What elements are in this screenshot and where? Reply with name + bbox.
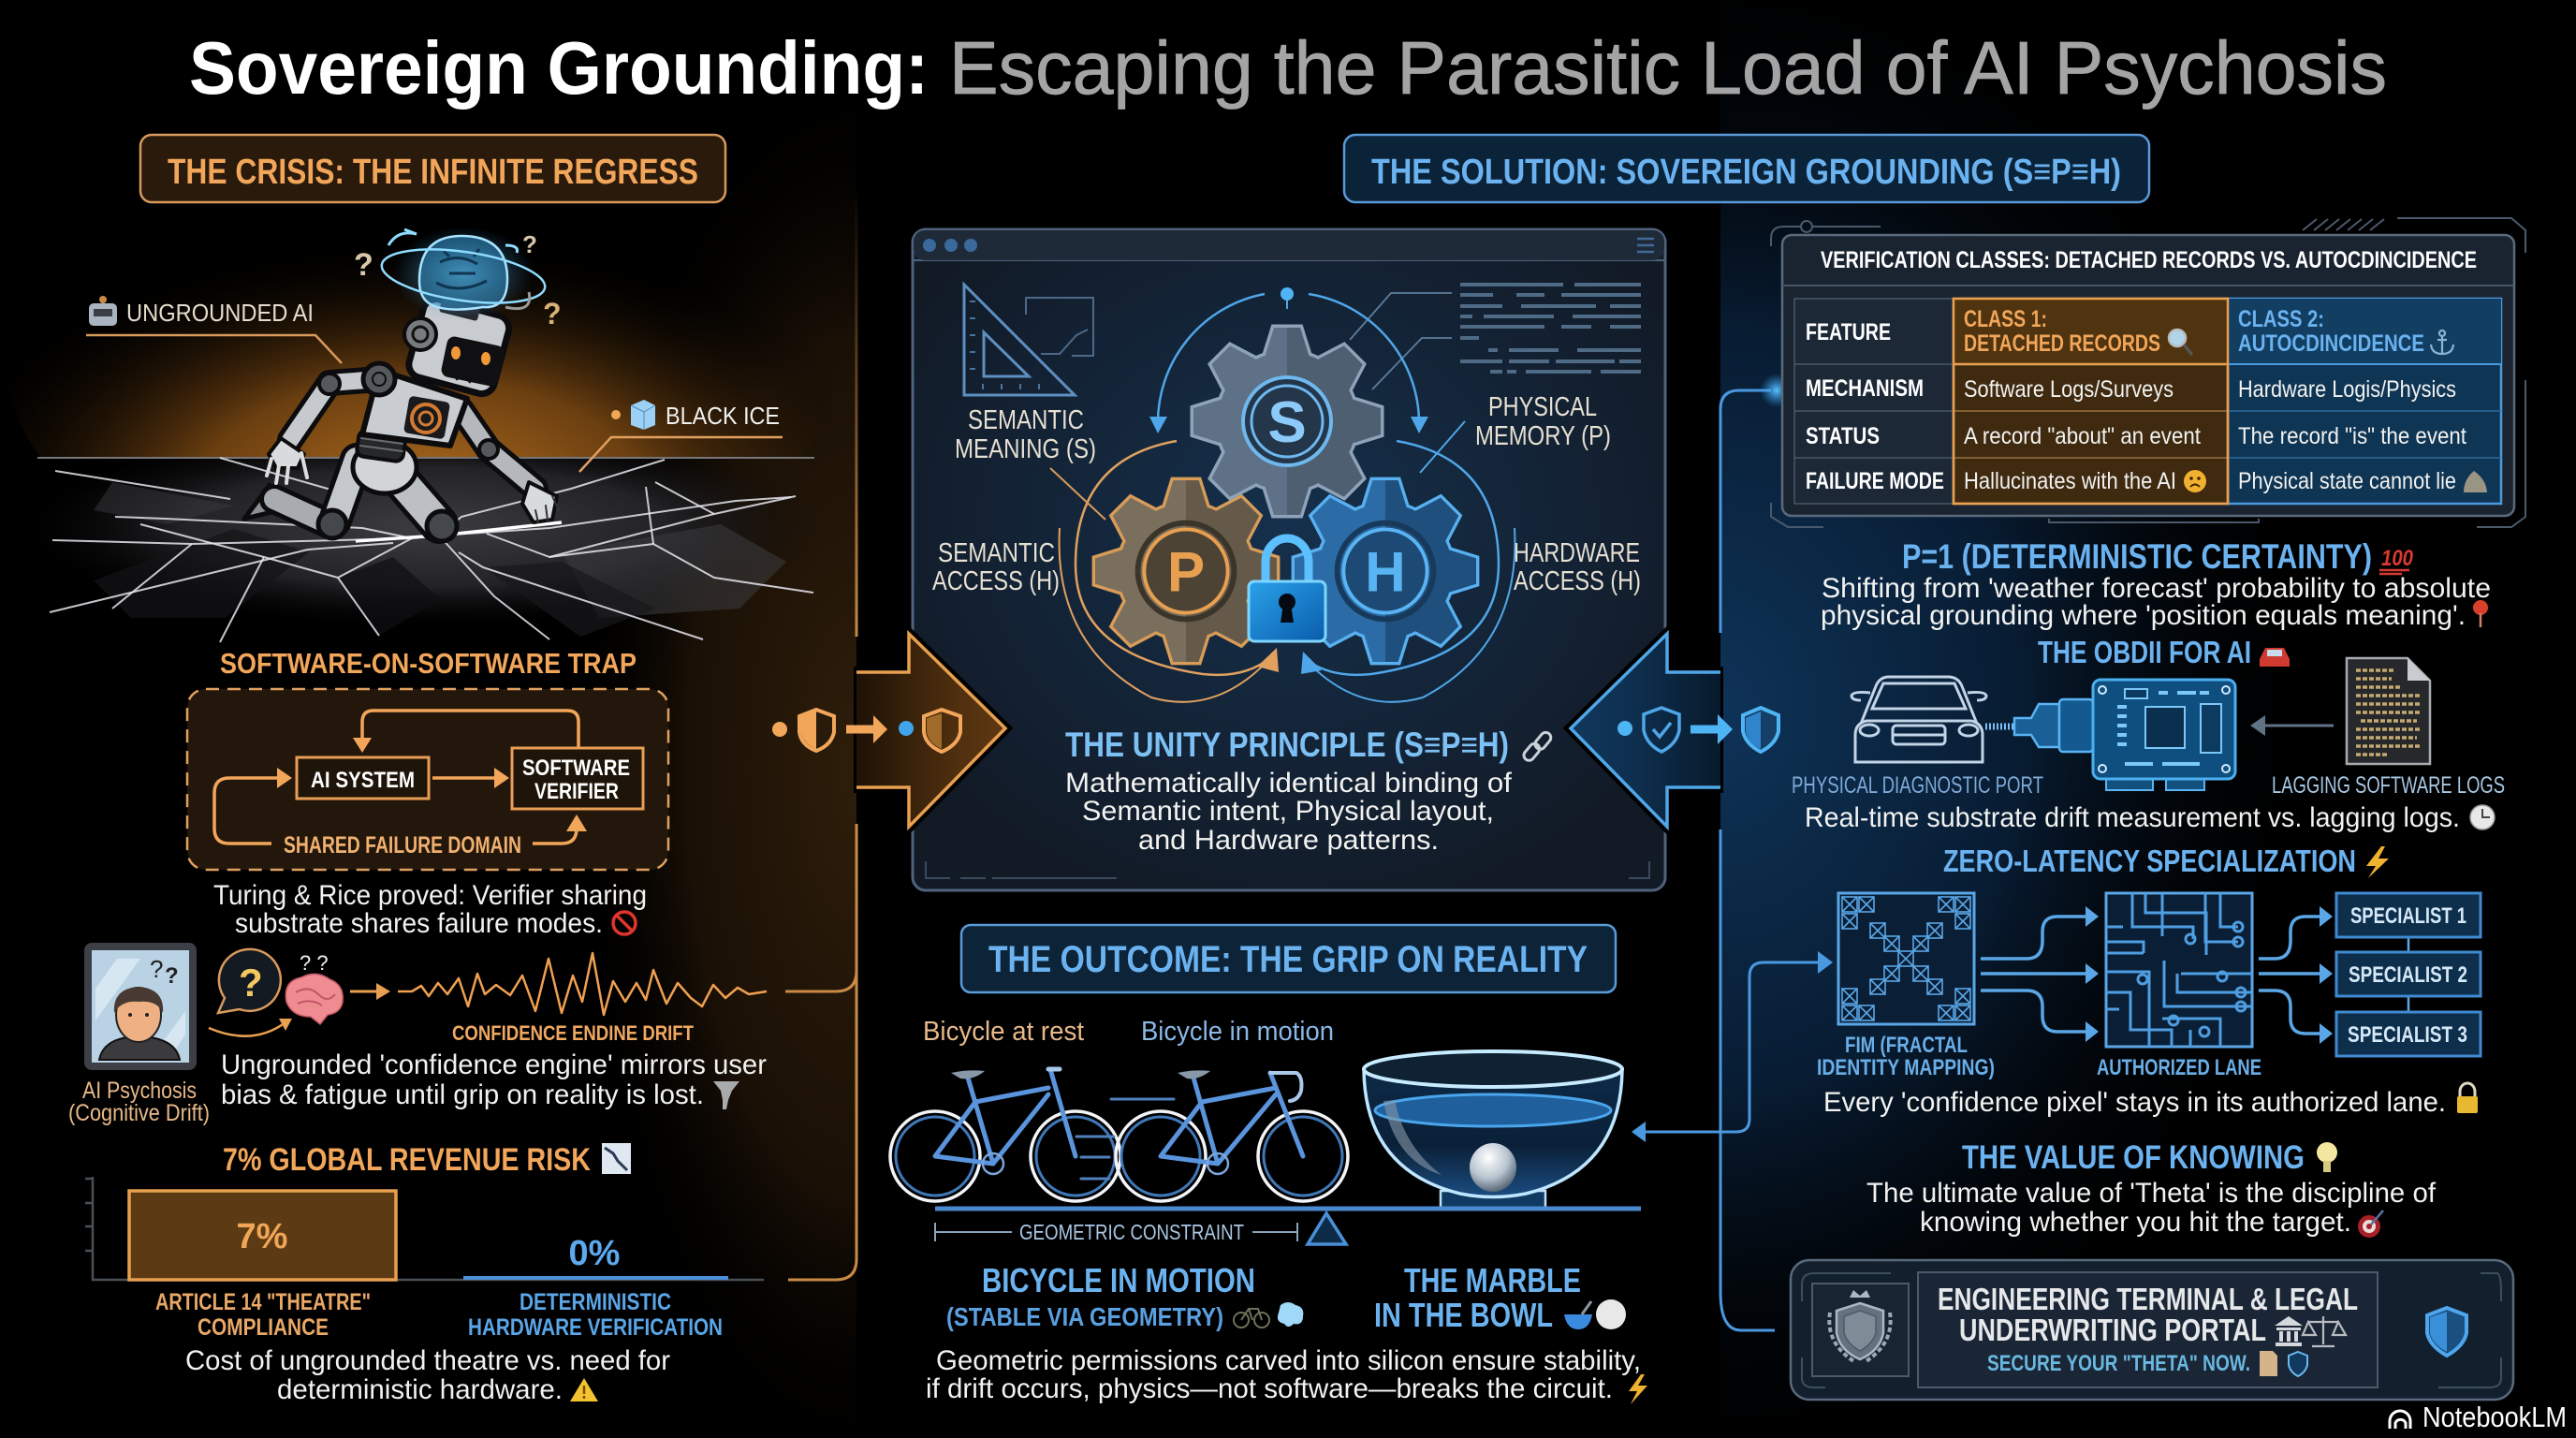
icon: small shield — [2289, 1352, 2307, 1376]
icon: speech bubble and brain: ? — [239, 961, 263, 1005]
robot — [244, 296, 559, 541]
text box: SECURE YOUR "THETA" NOW. — [1987, 1351, 2250, 1376]
outcome heading: THE OUTCOME: THE GRIP ON REALITY — [988, 939, 1588, 980]
heading: unity principle: THE UNITY PRINCIPLE (S≡P≡H) — [1065, 726, 1509, 764]
row: mechanism: Hardware Logis/Physics — [2238, 376, 2456, 403]
illustration: AI psychosis mirror: ? — [165, 963, 179, 989]
text box: UNDERWRITING PORTAL — [1959, 1313, 2266, 1347]
section: value of knowing: THE VALUE OF KNOWING — [1962, 1139, 2305, 1176]
text: confidence pixel: Every 'confidence pixel' stays in its authorized lane. — [1823, 1087, 2446, 1118]
node: software verifier — [512, 748, 643, 809]
icon: hundred: 100 — [2381, 546, 2414, 571]
text: real-time substrate: Real-time substrate drift measurement vs. lagging logs. — [1805, 802, 2460, 833]
node: software verifier: SOFTWARE — [522, 756, 630, 781]
icon: padlock — [1249, 538, 1325, 641]
chart: confidence engine drift waveform: CONFIDENCE ENDINE DRIFT — [452, 1021, 694, 1045]
bar: 0 percent: 0% — [569, 1234, 620, 1273]
label: physical memory — [1420, 392, 1611, 473]
label: Black Ice — [579, 400, 783, 472]
axis label: deterministic: HARDWARE VERIFICATION — [468, 1314, 723, 1341]
outcome heading — [961, 925, 1616, 992]
panel: engineering terminal portal — [1791, 1260, 2513, 1400]
caption: bicycle in motion: Bicycle in motion — [1141, 1017, 1334, 1047]
row: failure mode: Physical state cannot lie — [2238, 468, 2456, 494]
icon: OBD connector — [1985, 699, 2093, 752]
section: value of knowing: The ultimate value of 'Theta' is the discipline of — [1866, 1178, 2437, 1209]
labels: diagnostic port and logs: PHYSICAL DIAGNOSTIC PORT — [1792, 772, 2043, 799]
connector: crisis panel orange rail — [785, 187, 857, 1280]
illustration: marble in bowl — [1364, 1051, 1622, 1209]
icon: prohibited — [613, 912, 636, 934]
box: specialist 1 — [2336, 893, 2481, 937]
row: mechanism — [1806, 375, 2456, 403]
decorative data lines — [1350, 285, 1641, 389]
icon: warning — [570, 1378, 598, 1401]
label: physical memory: PHYSICAL — [1488, 392, 1597, 422]
text box — [1918, 1272, 2378, 1387]
text: confidence engine — [221, 1049, 767, 1110]
label: Ungrounded AI — [86, 296, 342, 363]
row: mechanism: Software Logs/Surveys — [1964, 376, 2174, 403]
text: unity description: Semantic intent, Physical layout, — [1082, 796, 1494, 827]
icon: half shield gold — [924, 710, 960, 752]
illustration: robot on cracked black ice — [22, 228, 814, 642]
text box: ENGINEERING TERMINAL & LEGAL — [1938, 1282, 2358, 1316]
row: failure mode — [1806, 468, 2487, 494]
label: semantic access: ACCESS (H) — [932, 566, 1060, 596]
caption: marble in bowl: IN THE BOWL — [1374, 1296, 1553, 1334]
box: specialist 2 — [2336, 952, 2481, 996]
node: AI system — [297, 757, 429, 799]
axis label: article 14 — [155, 1289, 371, 1341]
text: unity description: and Hardware patterns. — [1138, 825, 1439, 856]
label: hardware access — [1514, 538, 1641, 596]
caption: bicycle in motion stable — [946, 1261, 1303, 1331]
table column fills — [1794, 299, 2501, 504]
arrow: logs to board — [2250, 715, 2334, 736]
text: cost of theatre: Cost of ungrounded theatre vs. need for — [185, 1345, 670, 1376]
icon: bank — [2275, 1316, 2303, 1346]
arrows: FIM to lane — [1981, 906, 2099, 1042]
diagram: shared failure domain loop — [187, 689, 668, 870]
bar: 7 percent — [129, 1191, 396, 1280]
icon: rock — [2464, 471, 2487, 492]
icon: falling chart — [602, 1143, 631, 1174]
text: confidence engine: Ungrounded 'confidence engine' mirrors user — [221, 1049, 767, 1080]
box: specialist 3 — [2336, 1012, 2481, 1056]
label: hardware access: HARDWARE — [1514, 538, 1640, 568]
crisis heading — [140, 135, 725, 202]
icon: set square — [964, 285, 1093, 395]
arrow heads: solution rail — [1632, 374, 1833, 1142]
gear: S: S — [1267, 390, 1307, 455]
gear: H: H — [1365, 540, 1406, 603]
icon: speech bubble and brain: ? ? — [300, 951, 329, 975]
section: deterministic certainty: Shifting from 'weather forecast' probability to absolute — [1822, 573, 2491, 604]
section: value of knowing — [1866, 1139, 2437, 1238]
icon: portal shield — [2427, 1308, 2466, 1356]
heading: zero-latency specialization: ZERO-LATENCY SPECIALIZATION — [1943, 844, 2356, 878]
caption: FIM: IDENTITY MAPPING) — [1817, 1055, 1995, 1080]
label: physical memory: MEMORY (P) — [1475, 421, 1611, 451]
text: cost of theatre: deterministic hardware. — [277, 1374, 563, 1405]
section: value of knowing: knowing whether you hit the target. — [1920, 1207, 2351, 1238]
solution heading: THE SOLUTION: SOVEREIGN GROUNDING (S≡P≡H) — [1371, 153, 2121, 192]
title: Escaping the Parasitic Load of AI Psychosis — [949, 26, 2387, 110]
caption: AI psychosis: AI Psychosis — [82, 1078, 197, 1104]
text: geometric permissions: if drift occurs, physics—not software—breaks the circuit. — [926, 1373, 1613, 1404]
gear: P: P — [1167, 540, 1205, 603]
caption: bicycle in motion stable: (STABLE VIA GEOMETRY) — [946, 1302, 1223, 1331]
row: feature: DETACHED RECORDS — [1964, 330, 2160, 357]
spinning brain: ? — [354, 247, 373, 283]
spinning brain: ? — [543, 297, 562, 330]
text: cost of theatre — [185, 1345, 670, 1405]
title: Sovereign Grounding: — [189, 26, 929, 110]
caption: marble in bowl — [1374, 1261, 1626, 1334]
icon: bowl and marble — [1564, 1299, 1626, 1329]
icon: clock — [2470, 805, 2495, 829]
section: OBDII heading: THE OBDII FOR AI — [2038, 635, 2251, 669]
chart: confidence engine drift waveform — [398, 953, 767, 1045]
text: Turing and Rice: substrate shares failure modes. — [235, 908, 603, 939]
box: specialist 3: SPECIALIST 3 — [2348, 1022, 2467, 1048]
text: unity description: Mathematically identical binding of — [1065, 768, 1513, 799]
gear: S — [1193, 328, 1381, 515]
row: mechanism: MECHANISM — [1806, 375, 1924, 402]
icon: magnifier — [2169, 330, 2192, 355]
row: failure mode: Hallucinates with the AI — [1964, 468, 2176, 494]
solution heading — [1344, 135, 2149, 202]
label: semantic access: SEMANTIC — [938, 538, 1055, 568]
illustration: bicycle in motion — [1111, 1070, 1348, 1201]
text: Turing and Rice — [213, 880, 647, 939]
heading: software-on-software trap: SOFTWARE-ON-SOFTWARE TRAP — [220, 647, 637, 680]
axis label: deterministic — [468, 1289, 723, 1341]
axis label: article 14: ARTICLE 14 "THEATRE" — [155, 1289, 371, 1315]
illustration: bicycle at rest — [890, 1069, 1120, 1201]
diagram: authorized lane circuit — [2106, 893, 2252, 1047]
caption: bicycle at rest: Bicycle at rest — [923, 1017, 1084, 1047]
box: specialist 1: SPECIALIST 1 — [2350, 903, 2466, 929]
icon: circuit board — [2093, 680, 2235, 790]
section: deterministic certainty: physical grounding where 'position equals meaning'. — [1821, 600, 2466, 631]
icon: software log document — [2347, 658, 2430, 764]
illustration: AI psychosis mirror: ? — [150, 955, 163, 983]
diagram: fractal identity map — [1838, 893, 1974, 1024]
heading: revenue risk: 7% GLOBAL REVENUE RISK — [223, 1142, 591, 1178]
icon: light bulb — [2317, 1142, 2337, 1172]
icon: red car — [2260, 648, 2290, 667]
title — [189, 26, 2387, 110]
icon: lightning — [2366, 846, 2389, 878]
labels: diagnostic port and logs — [1792, 772, 2505, 799]
arcs: feedback loops — [1060, 294, 1515, 702]
label: Black Ice: BLACK ICE — [666, 402, 780, 430]
arrows: lane to specialists — [2259, 906, 2408, 1044]
bar: 0 percent — [463, 1234, 728, 1280]
label: semantic meaning — [955, 405, 1105, 520]
caption: marble in bowl: THE MARBLE — [1404, 1261, 1581, 1299]
icon: chain link — [1522, 730, 1553, 763]
illustration: car outline — [1852, 677, 1986, 762]
section: deterministic certainty: P=1 (DETERMINISTIC CERTAINTY) — [1902, 537, 2372, 576]
label: semantic meaning: MEANING (S) — [955, 434, 1096, 464]
text: Turing and Rice: Turing & Rice proved: Verifier sharing — [213, 880, 647, 911]
crest box — [1812, 1284, 1909, 1376]
icon: anchor — [2431, 330, 2453, 354]
caption: FIM — [1817, 1033, 1995, 1080]
icon: robot head — [89, 296, 117, 326]
label: hardware access: ACCESS (H) — [1514, 566, 1641, 596]
crisis heading: THE CRISIS: THE INFINITE REGRESS — [168, 153, 698, 192]
bar chart: revenue risk — [85, 1177, 764, 1341]
icon: check shield — [1644, 708, 1679, 752]
axis label: deterministic: DETERMINISTIC — [520, 1289, 671, 1315]
icon: half shield orange — [799, 710, 834, 751]
box: specialist 2: SPECIALIST 2 — [2349, 962, 2467, 988]
node: AI system: AI SYSTEM — [311, 768, 415, 793]
connectors: solution rail — [1643, 390, 1821, 1330]
label: semantic meaning: SEMANTIC — [968, 405, 1084, 435]
text: confidence engine: bias & fatigue until grip on reality is lost. — [221, 1079, 704, 1110]
caption: bicycle in motion stable: BICYCLE IN MOTION — [982, 1261, 1255, 1299]
icon: tornado — [713, 1081, 739, 1109]
caption: authorized lane: AUTHORIZED LANE — [2097, 1055, 2261, 1080]
spinning brain: ? — [522, 230, 537, 258]
icon: lightning — [1629, 1374, 1647, 1404]
icon: blue shield — [1743, 708, 1778, 752]
text: unity description — [1065, 768, 1513, 856]
panel: verification classes table — [1782, 235, 2514, 516]
icon: sad face — [2184, 470, 2206, 492]
background panel tints — [640, 97, 2198, 1326]
row: status: A record "about" an event — [1964, 423, 2201, 449]
row: feature: CLASS 2: — [2238, 306, 2324, 332]
icon: scales — [2303, 1316, 2346, 1346]
icon: gold lock — [2457, 1083, 2478, 1113]
row: feature: FEATURE — [1806, 319, 1891, 345]
arrow: crisis into unity — [772, 634, 1005, 827]
baseline and fulcrum — [935, 1209, 1641, 1244]
row: feature — [1806, 306, 2453, 357]
label: Ungrounded AI: UNGROUNDED AI — [126, 299, 314, 327]
row: failure mode: FAILURE MODE — [1806, 468, 1944, 494]
text: geometric permissions: Geometric permissions carved into silicon ensure stability, — [936, 1345, 1641, 1376]
icon: document — [2260, 1351, 2277, 1376]
caption: AI psychosis: (Cognitive Drift) — [68, 1100, 210, 1126]
icon: bicycle and wind — [1234, 1302, 1303, 1328]
illustration: AI psychosis mirror — [88, 946, 193, 1066]
caption: FIM: FIM (FRACTAL — [1845, 1033, 1968, 1058]
gear: P — [1095, 480, 1277, 662]
cracked ice floor — [28, 458, 824, 655]
bar: 7 percent: 7% — [237, 1217, 287, 1256]
axis label: article 14: COMPLIANCE — [198, 1314, 329, 1341]
row: status: The record "is" the event — [2238, 423, 2466, 449]
row: status: STATUS — [1806, 423, 1880, 449]
diagram: shared failure domain loop: SHARED FAILURE DOMAIN — [284, 832, 521, 858]
gear: H — [1295, 480, 1476, 662]
panel: unity principle — [913, 229, 1665, 890]
text: geometric permissions — [926, 1345, 1647, 1404]
icon: speech bubble and brain — [209, 949, 390, 1036]
section: deterministic certainty — [1821, 537, 2491, 631]
row: status — [1806, 423, 2466, 449]
spinning brain — [354, 227, 562, 330]
icon: target — [2358, 1211, 2383, 1238]
row: feature: AUTOCDINCIDENCE — [2238, 330, 2424, 357]
label: semantic access — [932, 538, 1060, 596]
node: software verifier: VERIFIER — [534, 779, 619, 804]
label: geometric constraint: GEOMETRIC CONSTRAINT — [1019, 1220, 1244, 1244]
icon: ice cube — [631, 400, 655, 430]
table decorative frame — [1771, 218, 2525, 527]
caption: AI psychosis — [68, 1078, 210, 1126]
arrow: solution into unity — [1571, 634, 1778, 827]
icon: red pin — [2473, 600, 2488, 627]
row: feature: CLASS 1: — [1964, 306, 2047, 332]
